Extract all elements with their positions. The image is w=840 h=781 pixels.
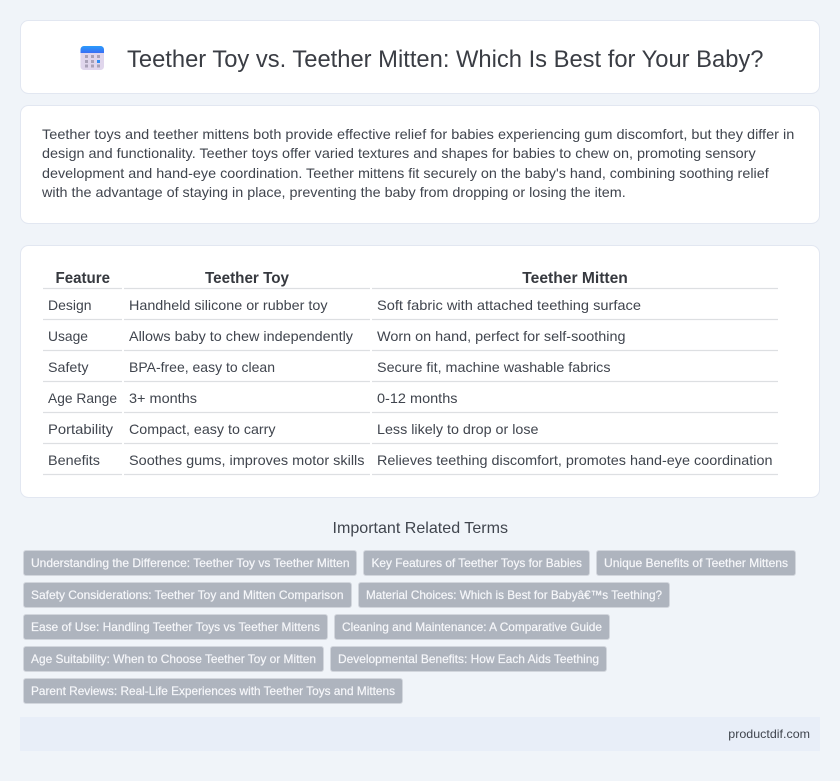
title: Teether Toy vs. Teether Mitten: Which Is Best for Your Baby? [127,46,764,73]
table row: safety: Secure fit, machine washable fabrics [377,359,610,375]
panel: header [20,20,820,94]
chip: Understanding the Difference: Teether Toy vs Teether Mitten [31,556,350,570]
table row: portability: Compact, easy to carry [129,421,276,437]
chip [24,614,328,640]
table row: design [48,297,641,313]
table row: age range [48,390,458,406]
table row: safety [48,359,610,375]
chip [364,550,590,576]
icon: calendar [80,46,104,70]
table row: design: Soft fabric with attached teething surface [377,297,641,313]
table row: age range: 3+ months [129,390,197,406]
chip: Developmental Benefits: How Each Aids Teething [338,652,599,666]
table row: benefits [48,452,772,468]
chip [24,678,402,704]
panel: comparison table [20,246,820,498]
table row: safety: BPA-free, easy to clean [129,359,275,375]
table row: age range: 0-12 months [377,390,458,406]
chip: Parent Reviews: Real-Life Experiences with Teether Toys and Mittens [31,684,395,698]
chip: Age Suitability: When to Choose Teether Toy or Mitten [31,652,316,666]
text block: introduction paragraph [41,126,794,200]
table row: usage: Allows baby to chew independently [129,328,353,344]
footer bar [20,717,820,751]
chip: Safety Considerations: Teether Toy and Mitten Comparison [31,588,344,602]
table row: usage: Worn on hand, perfect for self-soothing [377,328,626,344]
chip [334,614,610,640]
table row: benefits: Benefits [48,452,100,468]
table row: benefits: Soothes gums, improves motor skills [129,452,364,468]
chip [24,582,352,608]
table row: safety: Safety [48,359,88,375]
heading: important related terms: Important Related Terms [332,520,508,537]
table row: design: Design [48,297,92,313]
chip [330,646,606,672]
table row: design: Handheld silicone or rubber toy [129,297,328,313]
chip: Key Features of Teether Toys for Babies [372,556,582,570]
panel: introduction [20,106,820,224]
chip [24,646,324,672]
chip: Cleaning and Maintenance: A Comparative Guide [342,620,602,634]
table row: age range: Age Range [48,390,117,406]
chip [24,550,356,576]
table row: portability [48,421,539,437]
table row: usage [48,328,626,344]
footer source text: productdif.com [728,727,810,741]
chip [596,550,796,576]
text block: introduction paragraph: Teether toys and teether mittens both provide effective relief for babies experiencing gum discomfort, but they differ in [42,126,794,142]
table header row: Feature [56,270,110,287]
table row: benefits: Relieves teething discomfort, promotes hand-eye coordination [377,452,772,468]
table row: portability: Less likely to drop or lose [377,421,539,437]
chip: Ease of Use: Handling Teether Toys vs Teether Mittens [31,620,320,634]
chip: Unique Benefits of Teether Mittens [604,556,788,570]
related terms chips [24,550,796,704]
chip: Material Choices: Which is Best for Babyâ€™s Teething? [366,588,662,602]
table row: usage: Usage [48,328,88,344]
table header row: Teether Toy [205,270,289,287]
table header row [56,270,628,287]
text block: introduction paragraph: development and hand-eye coordination. Teether mittens fit securely on the baby's hand, combining soothing relief [42,165,769,181]
table header row: Teether Mitten [522,270,628,287]
chip [358,582,670,608]
table row: portability: Portability [48,421,113,437]
text block: introduction paragraph: with the advantage of staying in place, preventing the baby from dropping or losing the item. [41,184,626,200]
text block: introduction paragraph: design and functionality. Teether toys offer varied textures and shapes for babies to chew on, promoting sensory [42,145,756,161]
